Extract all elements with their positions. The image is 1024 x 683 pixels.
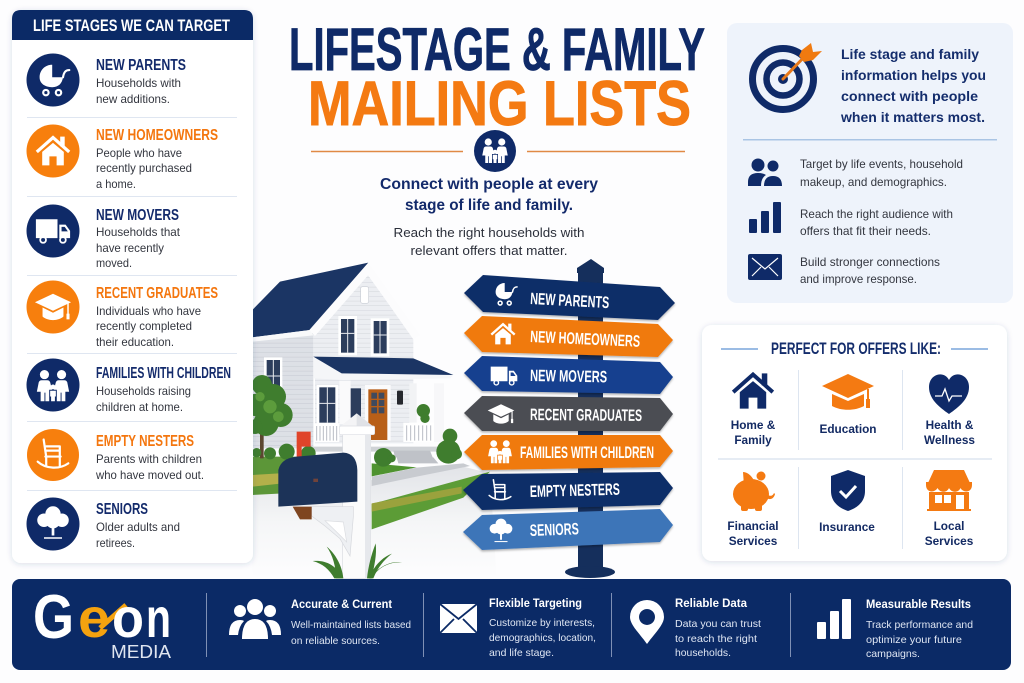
icon: target with arrow xyxy=(752,43,822,110)
callout text: Life stage and family xyxy=(841,47,979,63)
stage: recent graduates: RECENT GRADUATES xyxy=(96,285,218,302)
icon: envelope xyxy=(440,604,477,633)
logo: Geon Media xyxy=(33,583,171,662)
benefit: target by life events xyxy=(748,158,963,189)
benefit: reach the right audience: offers that fit their needs. xyxy=(800,225,931,238)
feature: measurable results: Track performance and xyxy=(866,619,973,631)
stage: families with children xyxy=(26,358,231,414)
feature: measurable results xyxy=(817,597,973,660)
offer: local services: Services xyxy=(925,534,974,548)
logo: Geon Media: o xyxy=(112,586,144,649)
panel: perfect for offers like xyxy=(702,325,1007,561)
title xyxy=(289,16,705,139)
tree and shrubs xyxy=(245,375,462,467)
feature: accurate and current: on reliable sources. xyxy=(291,635,380,647)
sign: new movers: NEW MOVERS xyxy=(530,367,607,386)
sign: recent graduates xyxy=(464,396,673,431)
callout text: information helps you xyxy=(841,68,986,84)
icon: group of people xyxy=(229,599,281,639)
feature: accurate and current xyxy=(229,597,411,647)
panel header: LIFE STAGES WE CAN TARGET xyxy=(33,16,230,35)
subheading: Connect with people at every xyxy=(380,176,599,193)
feature: measurable results: Measurable Results xyxy=(866,597,971,611)
stage: empty nesters: who have moved out. xyxy=(95,469,204,482)
benefit: reach the right audience: Reach the right audience with xyxy=(800,208,953,221)
offer: education xyxy=(819,374,877,436)
stage: recent graduates: their education. xyxy=(96,336,174,349)
stage: empty nesters: Parents with children xyxy=(96,453,202,466)
logo: Geon Media: e xyxy=(78,586,110,649)
stage: families with children: FAMILIES WITH CHILDREN xyxy=(96,365,231,382)
icon: bar chart xyxy=(817,599,851,639)
icon: people xyxy=(748,158,782,186)
feature: reliable data: households. xyxy=(675,647,731,659)
feature: reliable data xyxy=(630,596,761,659)
signpost xyxy=(463,259,675,578)
offer: home and family: Family xyxy=(734,433,772,447)
intro text: relevant offers that matter. xyxy=(410,243,568,258)
sign: families with children: FAMILIES WITH CHILDREN xyxy=(520,444,654,462)
house xyxy=(252,263,453,463)
logo: Geon Media: n xyxy=(146,586,171,649)
feature: accurate and current: Accurate & Current xyxy=(291,597,392,611)
stage: seniors: SENIORS xyxy=(96,501,148,518)
icon: family divider xyxy=(311,130,685,172)
offer: insurance xyxy=(819,470,875,534)
title: LIFESTAGE & FAMILY xyxy=(289,16,705,83)
stage: new parents: new additions. xyxy=(96,93,170,106)
logo: Geon Media: MEDIA xyxy=(111,642,171,662)
stage: recent graduates: recently completed xyxy=(96,320,192,333)
stage: new movers: have recently xyxy=(96,242,164,255)
stage: new homeowners: NEW HOMEOWNERS xyxy=(96,127,218,144)
stage: new movers: NEW MOVERS xyxy=(96,207,179,224)
illustration: house and mailbox scene xyxy=(245,263,497,578)
stage: new homeowners xyxy=(26,124,218,191)
panel header xyxy=(12,10,253,40)
stage: new parents xyxy=(26,54,186,106)
stage: empty nesters xyxy=(27,429,204,482)
sign: empty nesters: EMPTY NESTERS xyxy=(530,481,620,501)
benefit: build stronger connections: and improve response. xyxy=(800,273,917,286)
benefit: reach the right audience xyxy=(749,202,953,238)
stage: families with children: children at home. xyxy=(96,401,183,414)
plant xyxy=(313,543,403,578)
sign: new homeowners xyxy=(464,316,673,357)
feature: flexible targeting: Flexible Targeting xyxy=(489,596,582,610)
feature: flexible targeting xyxy=(440,596,596,659)
sign: new parents xyxy=(464,275,675,320)
stage: seniors: retirees. xyxy=(96,537,135,550)
pole xyxy=(565,259,615,578)
benefit: target by life events: makeup, and demographics. xyxy=(800,176,947,189)
icon: map pin xyxy=(630,600,664,644)
subheading xyxy=(380,176,599,214)
benefit: build stronger connections xyxy=(748,254,940,286)
stage: seniors: Older adults and xyxy=(96,521,180,534)
benefit: build stronger connections: Build stronger connections xyxy=(800,256,940,269)
offer: local services xyxy=(925,470,974,548)
sign: recent graduates: RECENT GRADUATES xyxy=(530,406,642,425)
callout text xyxy=(840,47,986,126)
offer: education: Education xyxy=(819,422,877,436)
stage: families with children: Households raising xyxy=(96,385,191,398)
feature: flexible targeting: demographics, location, xyxy=(489,632,596,644)
icon: bar chart xyxy=(749,202,781,233)
feature: measurable results: campaigns. xyxy=(866,648,920,660)
stage: new parents: Households with xyxy=(96,77,181,90)
feature: flexible targeting: Customize by interests, xyxy=(489,617,595,629)
sign: new homeowners: NEW HOMEOWNERS xyxy=(530,328,641,351)
feature: reliable data: to reach the right xyxy=(675,633,757,645)
stage: new movers: Households that xyxy=(96,226,181,239)
offer: financial services: Services xyxy=(729,534,778,548)
mailbox post xyxy=(312,413,375,578)
logo: Geon Media: G xyxy=(33,583,74,652)
sign: seniors xyxy=(463,509,673,550)
icon: envelope xyxy=(748,254,782,280)
offer: financial services: Financial xyxy=(727,519,779,533)
mailbox xyxy=(278,432,357,519)
offer: health and wellness: Health & xyxy=(926,418,974,432)
feature: reliable data: Data you can trust xyxy=(675,618,761,630)
sign: new movers xyxy=(464,356,673,394)
sign: seniors: SENIORS xyxy=(530,520,579,540)
panel heading: PERFECT FOR OFFERS LIKE: xyxy=(771,340,941,358)
stage: seniors xyxy=(26,498,180,550)
offer: financial services xyxy=(727,472,779,548)
panel: why lifestage data matters xyxy=(727,23,1013,303)
stage: new movers: moved. xyxy=(96,257,132,270)
panel: life stages we can target xyxy=(12,10,253,563)
stage: new homeowners: a home. xyxy=(96,178,136,191)
offer: health and wellness xyxy=(924,374,975,447)
intro text: Reach the right households with xyxy=(394,225,584,240)
intro text xyxy=(394,225,584,258)
stage: new homeowners: People who have xyxy=(96,147,182,160)
ground: driveway xyxy=(252,467,497,578)
panel: footer band xyxy=(12,579,1011,670)
callout text: connect with people xyxy=(841,89,978,105)
sign: families with children xyxy=(464,435,673,470)
sign: new parents: NEW PARENTS xyxy=(530,290,610,312)
callout text: when it matters most. xyxy=(840,110,985,126)
offer: local services: Local xyxy=(934,519,964,533)
offer: home and family: Home & xyxy=(731,418,776,432)
stage: empty nesters: EMPTY NESTERS xyxy=(96,433,194,450)
subheading: stage of life and family. xyxy=(405,197,573,214)
title: MAILING LISTS xyxy=(308,69,691,139)
feature: accurate and current: Well-maintained lists based xyxy=(291,619,411,631)
offer: home and family xyxy=(731,373,776,447)
offer: insurance: Insurance xyxy=(819,520,875,534)
feature: measurable results: optimize your future xyxy=(866,634,962,646)
benefit: target by life events: Target by life events, household xyxy=(800,158,963,171)
stage: recent graduates xyxy=(26,280,218,349)
stage: new parents: NEW PARENTS xyxy=(96,57,186,74)
feature: reliable data: Reliable Data xyxy=(675,596,747,610)
sign: empty nesters xyxy=(463,472,673,510)
feature: flexible targeting: and life stage. xyxy=(489,647,554,659)
stage: recent graduates: Individuals who have xyxy=(96,305,201,318)
lawn xyxy=(252,457,490,529)
stage: new homeowners: recently purchased xyxy=(96,162,192,175)
stage: new movers xyxy=(26,204,181,270)
offer: health and wellness: Wellness xyxy=(924,433,975,447)
